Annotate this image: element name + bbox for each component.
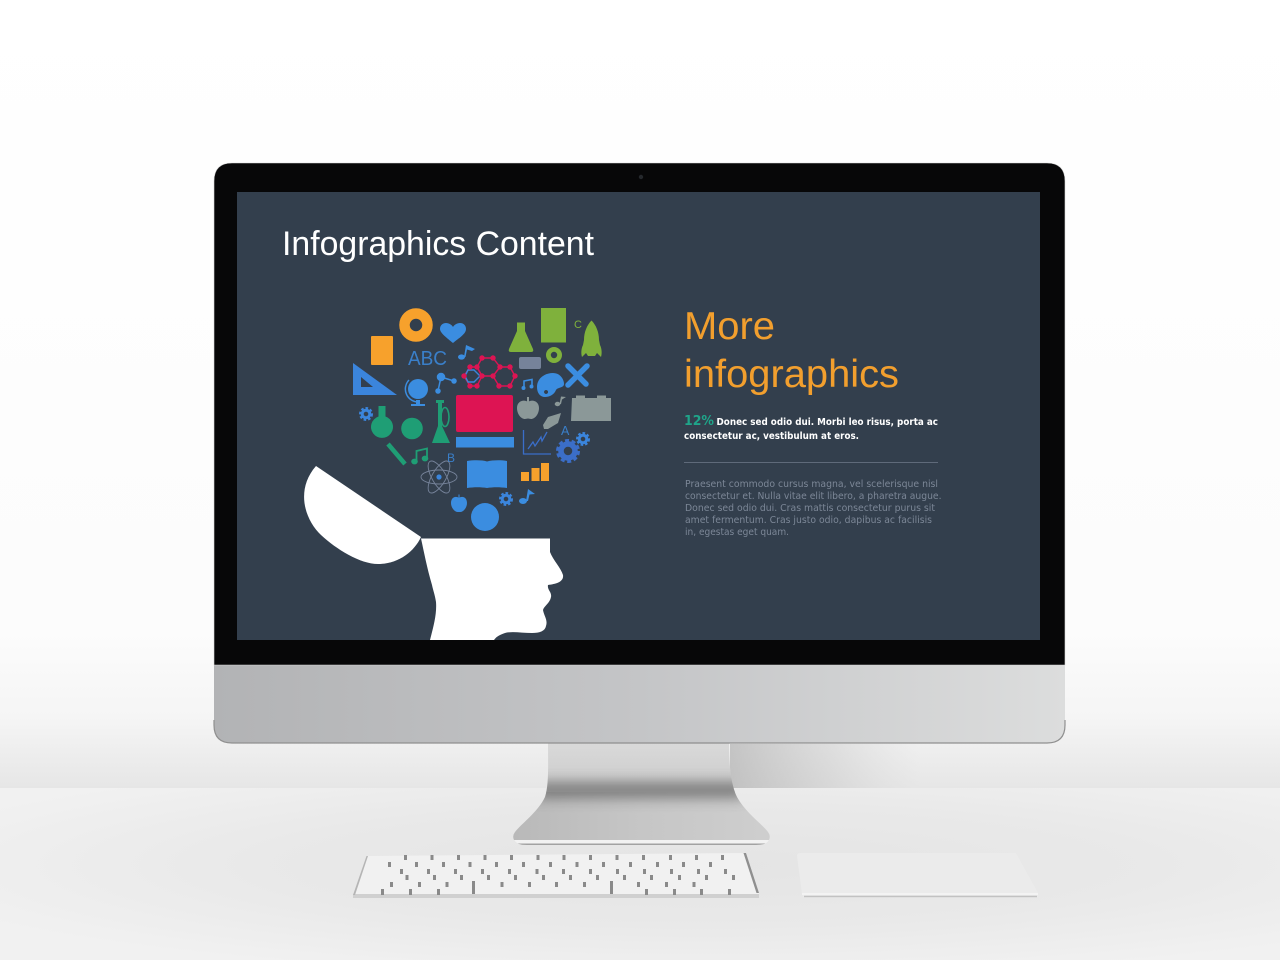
icon: small grey note xyxy=(555,396,566,406)
icon: ABC text: ABC xyxy=(408,347,447,370)
statistic line one: Donec sed odio dui. Morbi leo risus, porta ac xyxy=(716,417,938,428)
monitor xyxy=(214,163,1065,743)
highlighted statistic text xyxy=(684,413,938,442)
body paragraph: Praesent commodo cursus magna, vel scelerisque nisl xyxy=(685,479,938,490)
body paragraph: amet fermentum. Cras justo odio, dapibus ac facilisis xyxy=(685,515,932,526)
body paragraph: consectetur et. Nulla vitae elit libero, a pharetra augue. xyxy=(685,491,942,502)
keyboard xyxy=(353,853,759,898)
monitor chin xyxy=(214,660,1065,743)
icon: blue note bottom xyxy=(519,489,535,504)
icon: small gear left xyxy=(360,408,372,420)
icon: teal music notes xyxy=(412,448,427,464)
illustration: open head with icons xyxy=(304,308,611,640)
icon: small blue music notes xyxy=(522,380,533,389)
icon: gear bottom xyxy=(500,493,512,505)
icon: blue music note xyxy=(458,345,475,360)
icon: letter B: B xyxy=(447,451,455,465)
statistic line two: consectetur ac, vestibulum at eros. xyxy=(684,431,859,442)
icon: molecule xyxy=(436,374,456,393)
icon: green conical flask xyxy=(509,322,533,352)
icon: orange rectangle xyxy=(371,336,393,365)
head silhouette xyxy=(421,538,563,640)
icon: teal circle xyxy=(401,418,423,439)
head lid xyxy=(304,466,421,564)
heading: more infographics: infographics xyxy=(684,353,899,396)
icon: set square xyxy=(353,363,397,395)
icon: round flask xyxy=(371,406,393,438)
monitor black bezel xyxy=(214,163,1065,665)
icon: green rectangle xyxy=(541,308,566,342)
icon: paint palette xyxy=(537,373,564,397)
icon: heart xyxy=(440,323,466,343)
icon: atom xyxy=(421,458,457,496)
body paragraph xyxy=(685,479,942,538)
icon: blue ruler xyxy=(456,437,514,448)
icon: blue apple xyxy=(451,494,467,512)
icon: crossed tools xyxy=(568,366,587,385)
icon: pencil xyxy=(388,444,405,464)
body paragraph: in, egestas eget quam. xyxy=(685,527,789,538)
icon: grey battery xyxy=(571,396,611,421)
percentage: 12% xyxy=(684,413,714,429)
icon: grey rounded bar xyxy=(519,357,541,369)
body paragraph: Donec sed odio dui. Cras mattis consectetur purus sit xyxy=(685,503,935,514)
icon: blue circle xyxy=(471,503,499,531)
heading: more infographics: More xyxy=(684,305,775,348)
trackpad xyxy=(797,853,1038,898)
icon: orange bar chart xyxy=(521,463,549,481)
icon: line chart xyxy=(524,430,551,454)
webcam xyxy=(639,175,643,179)
icon: red hexagon network xyxy=(461,355,518,389)
icon: trumpet xyxy=(432,400,450,443)
icon: rocket xyxy=(581,320,602,357)
icon: large gear xyxy=(558,440,578,462)
icon: orange donut xyxy=(404,314,428,336)
icon: globe xyxy=(405,379,428,406)
icon: pen nib xyxy=(543,413,561,429)
heading: more infographics xyxy=(684,305,899,396)
icon: open book xyxy=(467,460,507,488)
icon: grey apple xyxy=(517,397,539,419)
slide screen background xyxy=(237,192,1040,640)
icon: red laptop screen xyxy=(456,395,513,432)
icon: green donut xyxy=(548,349,560,361)
slide title: Infographics Content xyxy=(282,225,594,263)
icon: small gear right xyxy=(577,433,589,445)
icon: letter A: A xyxy=(561,424,570,438)
icon: letter C: C xyxy=(574,319,582,331)
monitor stand xyxy=(513,744,770,845)
